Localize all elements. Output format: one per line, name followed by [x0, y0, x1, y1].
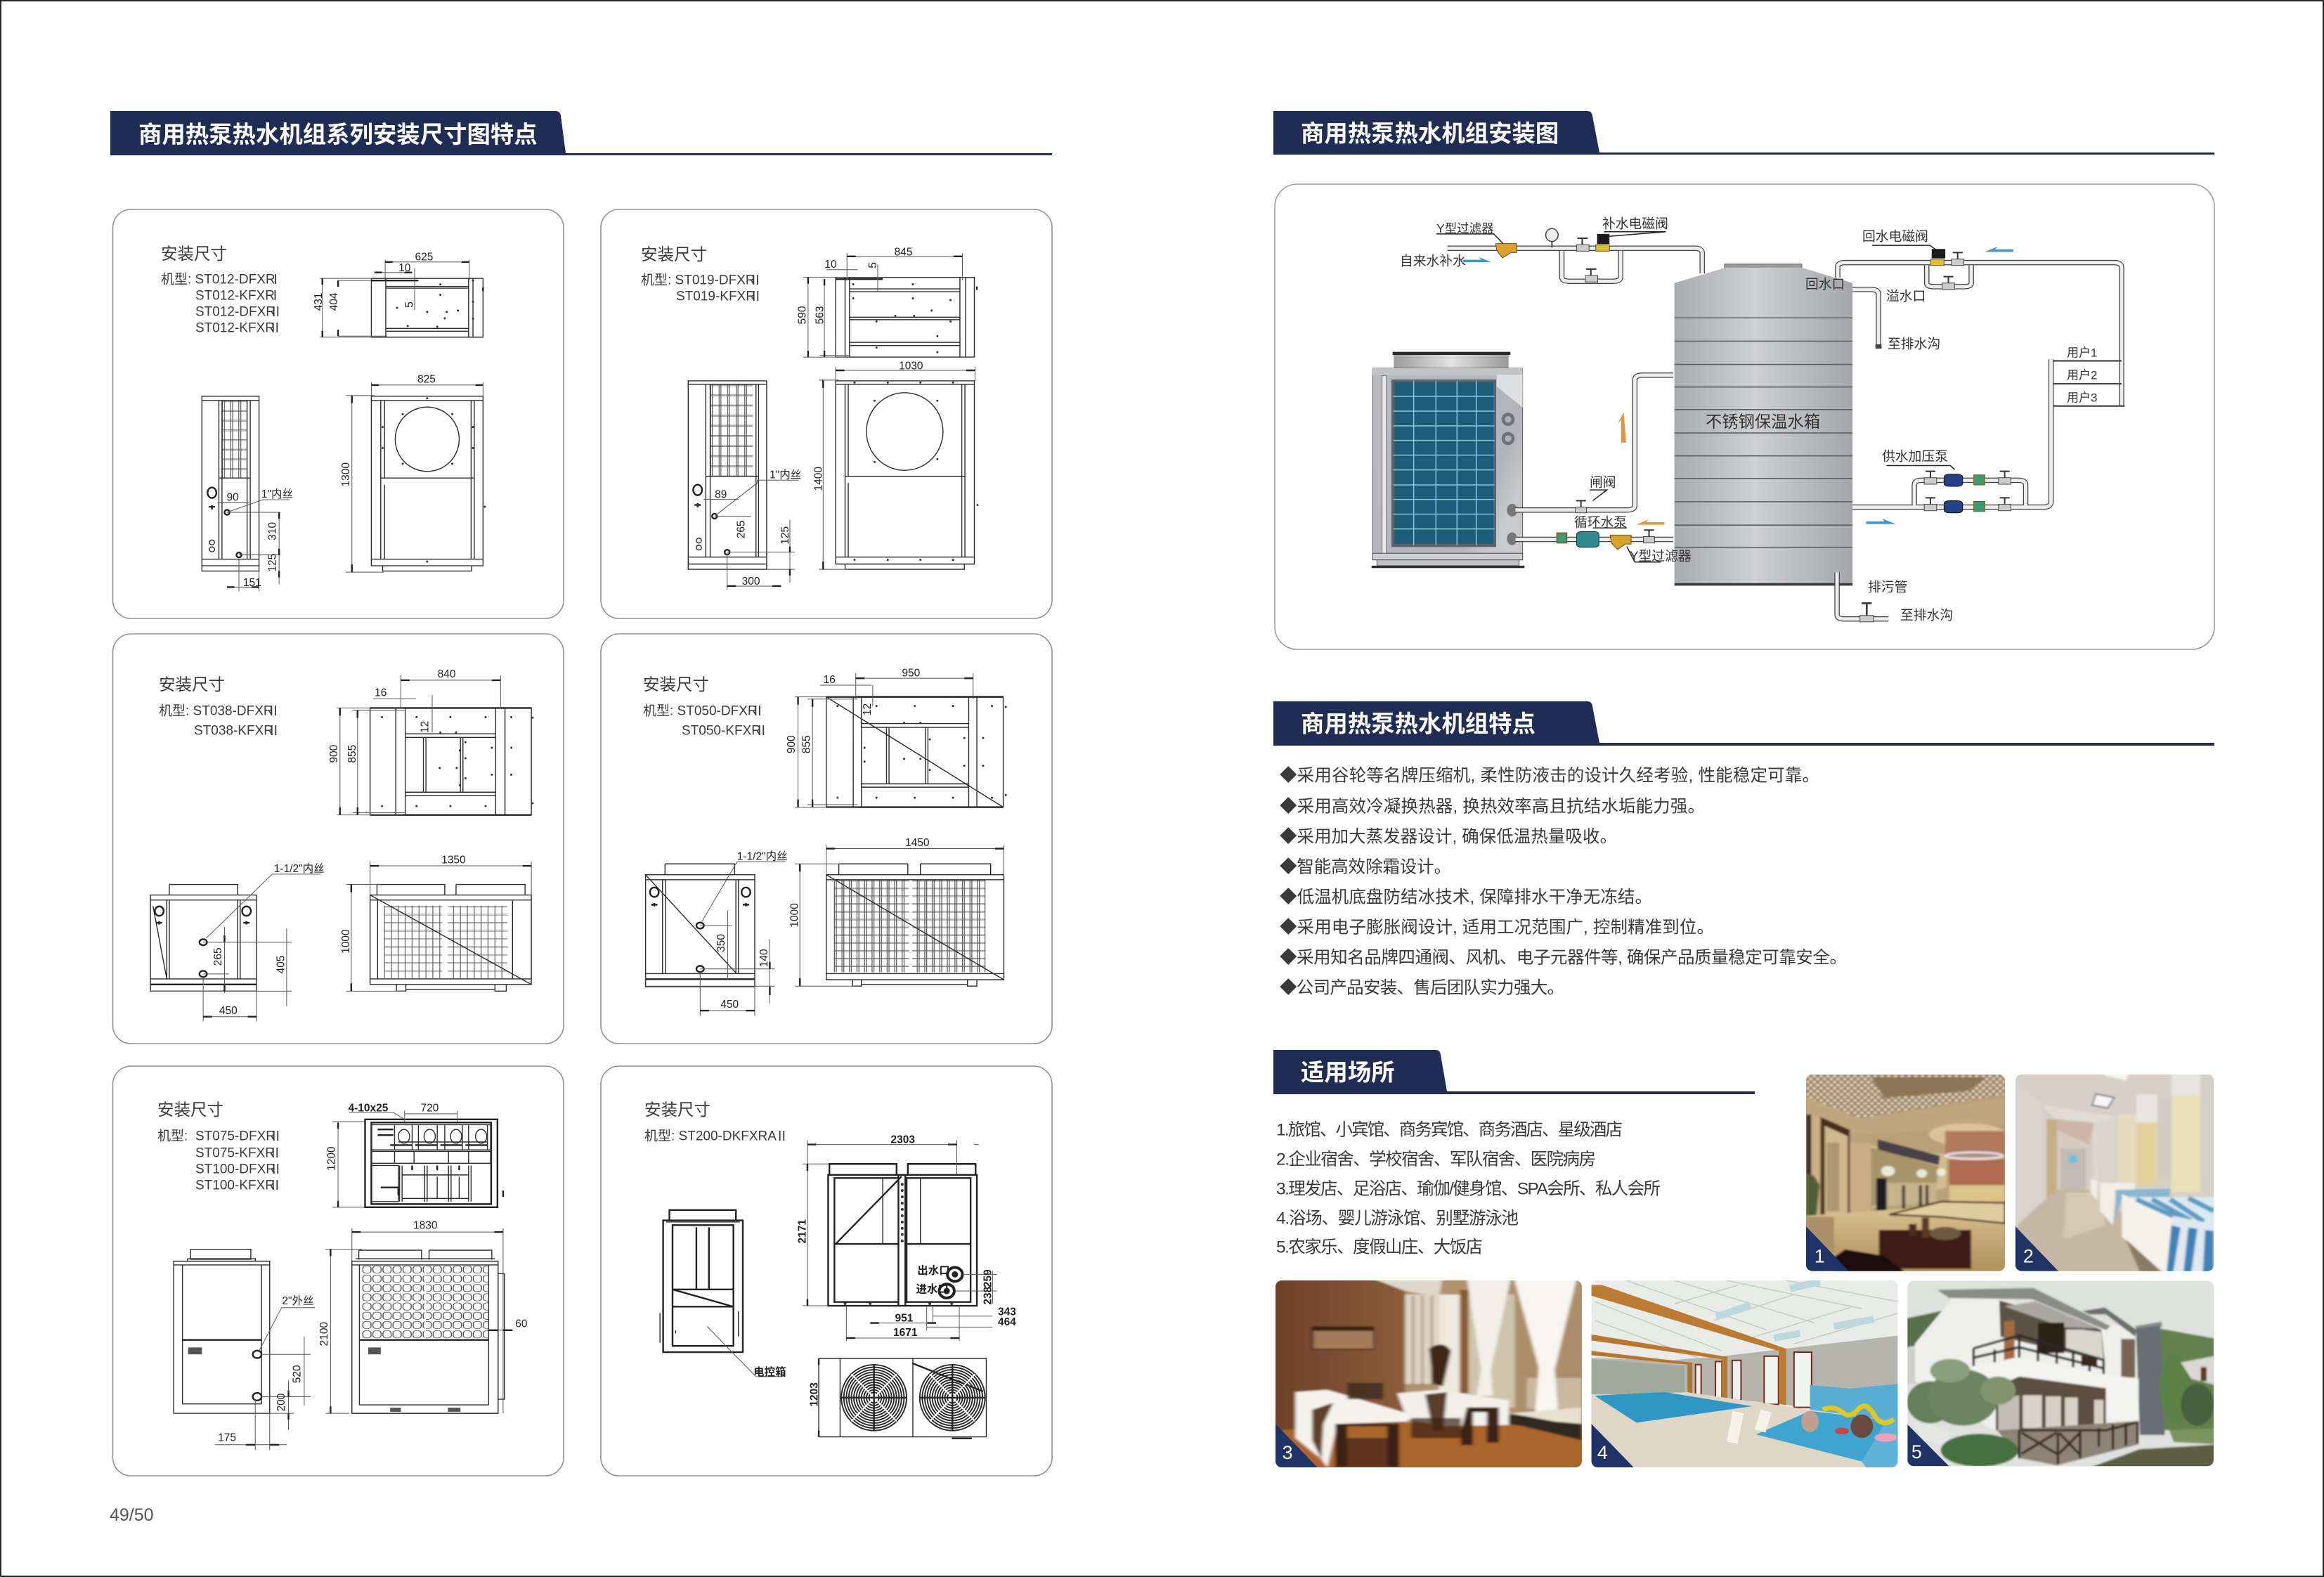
dimension drawings: 1"内丝	[770, 468, 801, 481]
dimension drawings: 10	[824, 259, 837, 271]
diagram labels: 闸阀	[1590, 475, 1616, 489]
text block: feature list	[1280, 766, 1847, 998]
heading: installation diagram	[1273, 111, 2214, 155]
dimension drawings: 900	[328, 744, 340, 763]
model list: ST075-DFXRⅡ	[195, 1129, 283, 1144]
dimension drawings: 电控箱	[753, 1365, 786, 1379]
diagram labels: 用户3	[2067, 391, 2097, 405]
diagram labels: 回水电磁阀	[1862, 229, 1928, 243]
dimension drawings	[688, 246, 978, 590]
page number: 49/50	[110, 1505, 154, 1525]
photo 4: indoor pool	[1592, 1280, 1897, 1467]
dimension drawings: 140	[758, 949, 770, 967]
diagram labels: 不锈钢保温水箱	[1706, 413, 1820, 431]
dimension drawings: 405	[275, 955, 287, 973]
dimension drawings: 1300	[340, 462, 352, 487]
dimension drawings: 1450	[905, 837, 930, 849]
dimension drawings: 5	[403, 301, 415, 308]
stainless steel water tank	[1675, 264, 1852, 585]
model list: 机型:	[157, 1129, 188, 1144]
dimension drawings: 90	[226, 492, 239, 504]
dimension drawings: 16	[375, 687, 387, 699]
model list: ST100-DFXRⅡ	[195, 1162, 283, 1176]
dimension drawings: 1203	[808, 1382, 820, 1407]
model list: ST100-KFXRⅡ	[195, 1178, 282, 1193]
model list	[161, 271, 283, 336]
diagram labels	[1400, 216, 2097, 623]
panel: ST012 dimensions	[112, 209, 564, 618]
dimension drawings: 进水口	[916, 1283, 949, 1295]
dimension drawings: 1-1/2"内丝	[274, 862, 325, 875]
text block: feature list: ◆采用知名品牌四通阀、风机、电子元器件等, 确保产品质量稳定可靠安全。	[1280, 947, 1847, 967]
dimension drawings: 1-1/2"内丝	[737, 850, 788, 862]
dimension drawings: 2100	[318, 1322, 330, 1346]
panel: ST050 dimensions	[601, 634, 1052, 1044]
photo 2: hospital ward: 2	[2023, 1246, 2034, 1267]
model list: ST012-KFXRⅠ	[195, 288, 282, 304]
model line: 机型: ST200-DKFXRAⅡ	[644, 1129, 788, 1144]
panel: ST019 dimensions	[601, 209, 1052, 618]
panel: installation diagram	[1275, 184, 2214, 649]
heading: installation dimensions: 商用热泵热水机组系列安装尺寸图特点	[138, 122, 538, 148]
model list: 机型: ST038-DFXRⅡ	[159, 703, 280, 718]
dimension drawings: 16	[824, 674, 836, 686]
model list	[157, 1129, 283, 1193]
dimension drawings: 10	[398, 262, 411, 274]
dimension drawings: 200	[275, 1394, 287, 1411]
dimension drawings: 12	[862, 703, 874, 715]
dimension drawings: 1350	[441, 855, 466, 867]
diagram labels: 排污管	[1868, 579, 1907, 595]
dimension drawings: 1830	[413, 1220, 437, 1232]
dimension drawings: 2303	[890, 1134, 915, 1146]
dimension drawings: 951	[895, 1312, 914, 1324]
photo 2: hospital ward	[2010, 1070, 2219, 1276]
diagram labels: 用户2	[2067, 368, 2097, 382]
dimension drawings	[660, 1134, 1016, 1439]
dimension drawings: 845	[895, 246, 913, 258]
dimension drawings: 563	[814, 306, 826, 324]
dimension drawings: 1000	[340, 929, 352, 954]
dimension drawings: 265	[736, 520, 748, 538]
model list	[159, 703, 280, 738]
dimension drawings: 343	[998, 1306, 1016, 1318]
text block: venue list: 2.企业宿舍、学校宿舍、军队宿舍、医院病房	[1276, 1150, 1596, 1169]
model list: 机型: ST019-DFXRⅡ	[641, 273, 762, 288]
diagram labels: 循环水泵	[1574, 514, 1627, 530]
dimension drawings: 238	[982, 1286, 994, 1305]
dimension drawings: 1671	[893, 1327, 918, 1339]
panel title: 安装尺寸	[644, 1101, 710, 1119]
dimension drawings: 151	[243, 577, 261, 589]
dimension drawings: 125	[779, 526, 791, 545]
text block: feature list: ◆采用加大蒸发器设计, 确保低温热量吸收。	[1280, 826, 1617, 846]
heading: installation diagram: 商用热泵热水机组安装图	[1301, 121, 1559, 148]
dimension drawings: 1400	[813, 467, 825, 491]
dimension drawings	[150, 668, 533, 1021]
flow arrows	[1463, 247, 2013, 525]
dimension drawings: 855	[801, 735, 813, 753]
dimension drawings	[202, 251, 485, 591]
photo 1: hotel lobby: 1	[1815, 1246, 1825, 1267]
dimension drawings: 625	[415, 251, 433, 263]
diagram labels: Y型过滤器	[1630, 548, 1692, 564]
dimension drawings: 720	[421, 1102, 439, 1114]
panel title: 安装尺寸	[157, 1101, 223, 1119]
panel: ST200 dimensions	[601, 1066, 1052, 1476]
model list: ST075-KFXRⅡ	[195, 1146, 282, 1161]
photo 4: indoor pool: 4	[1597, 1442, 1608, 1463]
dimension drawings: 1"内丝	[261, 488, 293, 500]
panel title: 安装尺寸	[643, 675, 709, 694]
dimension drawings	[174, 1102, 527, 1450]
text block: feature list: ◆低温机底盘防结冰技术, 保障排水干净无冻结。	[1280, 887, 1652, 907]
panel title: 安装尺寸	[159, 675, 225, 694]
text block: venue list: 5.农家乐、度假山庄、大饭店	[1276, 1237, 1483, 1257]
model list: ST050-KFXRⅡ	[682, 724, 768, 738]
dimension drawings: 5	[867, 262, 879, 268]
dimension drawings: 1000	[789, 903, 801, 928]
text block: feature list: ◆智能高效除霜设计。	[1280, 857, 1451, 877]
dimension drawings: 2171	[796, 1219, 808, 1243]
model list: ST038-KFXRⅡ	[194, 724, 280, 738]
model list: ST012-KFXRⅡ	[195, 320, 282, 336]
text block: feature list: ◆采用电子膨胀阀设计, 适用工况范围广, 控制精准到位。	[1280, 918, 1714, 937]
diagram labels: 自来水补水	[1400, 253, 1466, 268]
dimension drawings: 175	[218, 1432, 236, 1443]
diagram labels: 补水电磁阀	[1602, 216, 1668, 231]
heading: unit features: 商用热泵热水机组特点	[1301, 711, 1536, 738]
diagram labels: Y型过滤器	[1436, 221, 1494, 235]
text block: venue list	[1276, 1120, 1661, 1257]
panel: ST038 dimensions	[112, 634, 564, 1044]
heading: applicable venues: 适用场所	[1301, 1060, 1395, 1086]
diagram labels: 用户1	[2067, 346, 2097, 360]
heat pump unit	[1372, 352, 1524, 568]
photo 3: spa room	[1268, 1276, 1590, 1472]
diagram labels: 回水口	[1805, 277, 1845, 291]
photo 5: villa by the water: 5	[1911, 1441, 1922, 1462]
valves, pumps and filters	[1436, 228, 2011, 622]
dimension drawings: 300	[742, 576, 760, 588]
panel: ST075/ST100 dimensions	[112, 1066, 564, 1476]
dimension drawings: 259	[982, 1269, 994, 1287]
dimension drawings: 855	[346, 745, 358, 763]
text block: feature list: ◆采用高效冷凝换热器, 换热效率高且抗结水垢能力强。	[1280, 797, 1705, 817]
dimension drawings: 431	[313, 293, 325, 311]
dimension drawings: 590	[796, 306, 808, 324]
text block: feature list: ◆公司产品安装、售后团队实力强大。	[1280, 978, 1564, 998]
dimension drawings: 900	[786, 735, 798, 753]
text block: venue list: 3.理发店、足浴店、瑜伽/健身馆、SPA会所、私人会所	[1276, 1179, 1661, 1199]
dimension drawings: 60	[515, 1318, 527, 1330]
dimension drawings: 840	[438, 668, 456, 680]
model list: 机型: ST012-DFXRⅠ	[161, 271, 283, 287]
water pipes	[1448, 248, 2124, 619]
photo 3: spa room: 3	[1283, 1442, 1293, 1463]
dimension drawings: 出水口	[917, 1264, 950, 1277]
panel title: 安装尺寸	[641, 245, 707, 264]
model list: 机型: ST050-DFXRⅡ	[643, 703, 765, 718]
model list: ST019-KFXRⅡ	[676, 290, 762, 304]
dimension drawings: 404	[328, 292, 340, 311]
panel title: 安装尺寸	[161, 245, 227, 263]
dimension drawings: 2"外丝	[282, 1294, 313, 1307]
dimension drawings: 125	[267, 554, 279, 572]
dimension drawings: 350	[715, 934, 727, 952]
diagram labels: 供水加压泵	[1882, 448, 1948, 464]
text block: venue list: 1.旅馆、小宾馆、商务宾馆、商务酒店、星级酒店	[1276, 1120, 1623, 1140]
heading: installation dimensions	[110, 111, 1052, 155]
dimension drawings: 450	[720, 999, 739, 1011]
dimension drawings: 89	[715, 489, 727, 501]
model list: ST012-DFXRⅡ	[195, 305, 283, 319]
dimension drawings: 950	[902, 668, 921, 680]
diagram labels: 至排水沟	[1900, 607, 1953, 623]
diagram labels: 溢水口	[1886, 288, 1926, 304]
dimension drawings: 310	[267, 522, 279, 540]
dimension drawings: 1030	[899, 361, 923, 372]
dimension drawings: 265	[212, 947, 224, 966]
photo 5: villa by the water	[1903, 1276, 2219, 1471]
heading: unit features	[1273, 701, 2214, 746]
dimension drawings: 4-10x25	[349, 1102, 389, 1114]
dimension drawings: 450	[219, 1005, 238, 1017]
dimension drawings: 825	[417, 373, 436, 385]
heading: applicable venues	[1273, 1050, 1755, 1094]
dimension drawings: 520	[292, 1365, 304, 1383]
dimension drawings: 464	[998, 1316, 1016, 1328]
dimension drawings: 12	[420, 721, 431, 733]
dimension drawings	[646, 668, 1006, 1016]
dimension drawings: 1200	[326, 1146, 338, 1171]
diagram labels: 至排水沟	[1888, 336, 1940, 351]
text block: feature list: ◆采用谷轮等名牌压缩机, 柔性防液击的设计久经考验, 性能稳定可靠。	[1280, 766, 1819, 786]
text block: venue list: 4.浴场、婴儿游泳馆、别墅游泳池	[1276, 1209, 1519, 1228]
model list	[643, 703, 768, 738]
model list	[641, 273, 762, 304]
photo 1: hotel lobby	[1801, 1070, 2010, 1276]
